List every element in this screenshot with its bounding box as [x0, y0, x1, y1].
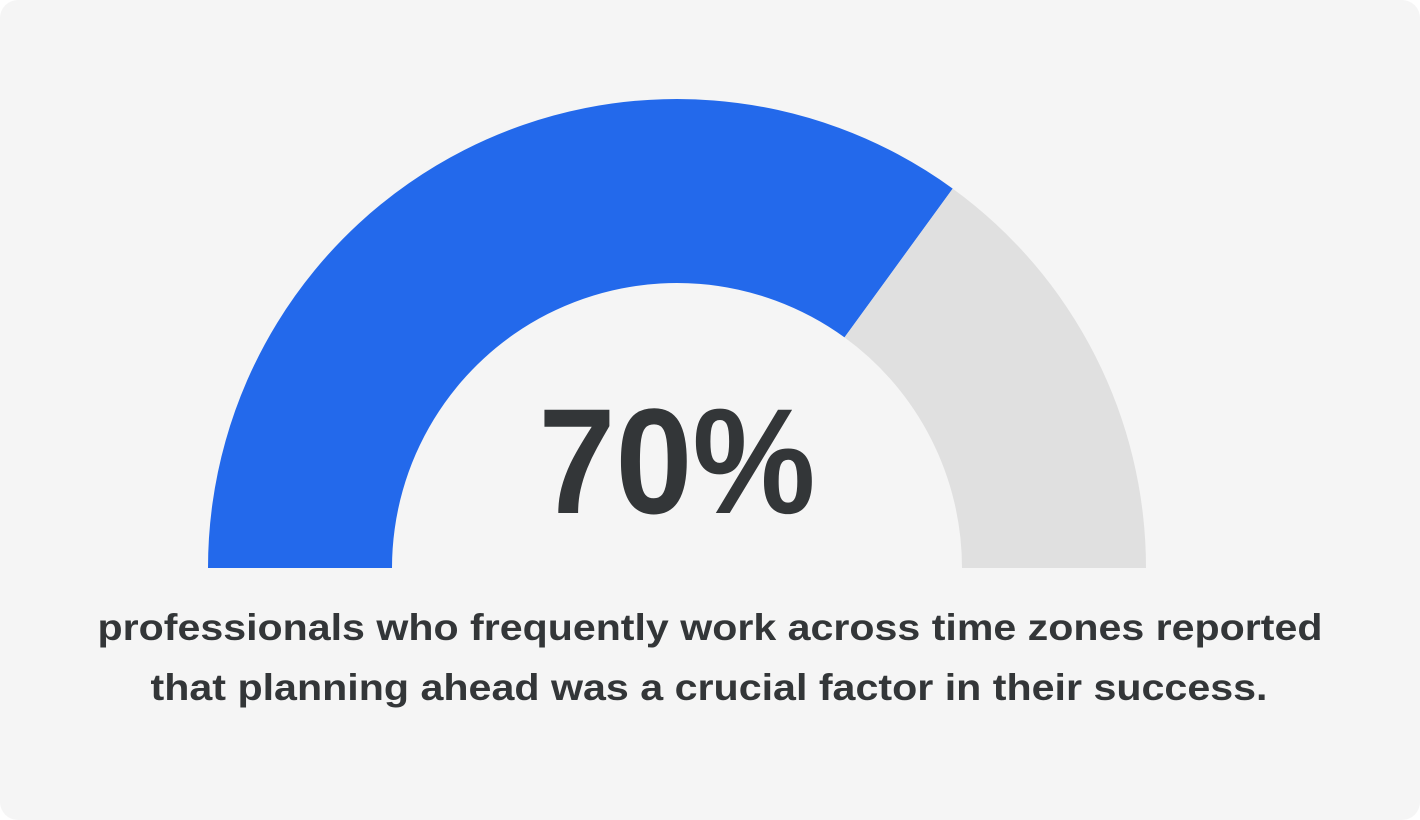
gauge chart [208, 99, 1146, 568]
caption text: professionals who frequently work across time zones reported [98, 607, 1322, 648]
big percentage: 70% [538, 377, 816, 545]
caption text [98, 607, 1322, 708]
gauge: remaining 30% segment [844, 189, 1146, 568]
caption text: that planning ahead was a crucial factor in their success. [150, 667, 1268, 708]
gauge: filled 70% segment [208, 99, 953, 568]
